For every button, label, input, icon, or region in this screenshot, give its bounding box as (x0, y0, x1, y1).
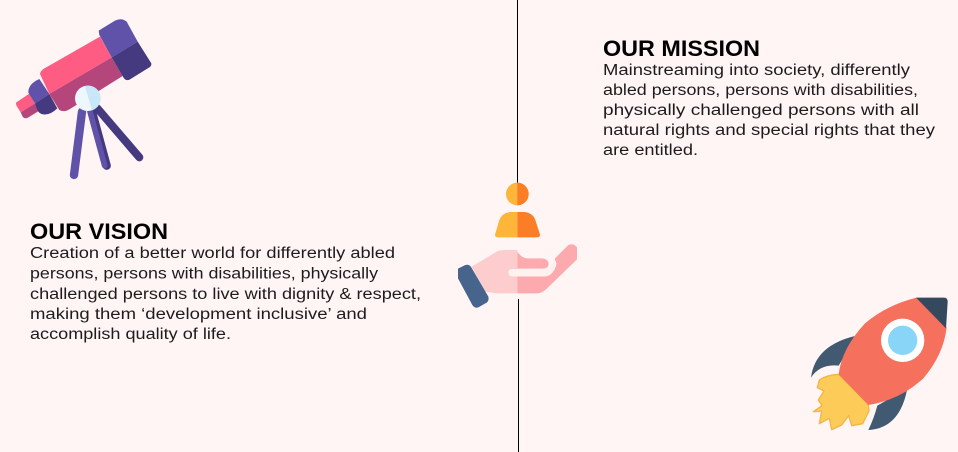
text block: vision description (30, 245, 421, 343)
text block: vision description: Creation of a better world for differently abled (30, 245, 395, 262)
icon: rocket (811, 298, 948, 430)
panel: our vision (30, 219, 421, 343)
text block: mission description: abled persons, persons with disabilities, (603, 82, 918, 99)
text block: vision description: accomplish quality of life. (30, 326, 231, 343)
text block: mission description: Mainstreaming into society, differently (603, 62, 910, 79)
person body (495, 212, 540, 237)
rocket flame (813, 374, 869, 430)
text block: mission description: are entitled. (603, 142, 698, 159)
text block: vision description: persons, persons with disabilities, physically (30, 266, 378, 282)
text block: mission description: natural rights and special rights that they (603, 122, 935, 139)
rocket nose (916, 298, 948, 328)
icon: telescope (16, 19, 151, 175)
heading: our mission: OUR MISSION (603, 36, 760, 61)
text block: vision description: challenged persons to live with dignity & respect, (30, 286, 421, 303)
text block: mission description: physically challenged persons with all (603, 102, 919, 119)
text block: mission description (603, 62, 935, 159)
person head (506, 183, 529, 205)
rocket fins (811, 336, 907, 430)
rocket window (881, 319, 924, 362)
panel: our mission (603, 36, 935, 159)
hand (472, 244, 577, 293)
rocket body (839, 298, 947, 405)
sleeve cuff (458, 265, 489, 308)
heading: our vision: OUR VISION (30, 219, 168, 244)
icon: hand holding person (458, 183, 577, 308)
text block: vision description: making them ‘development inclusive’ and (30, 306, 367, 323)
